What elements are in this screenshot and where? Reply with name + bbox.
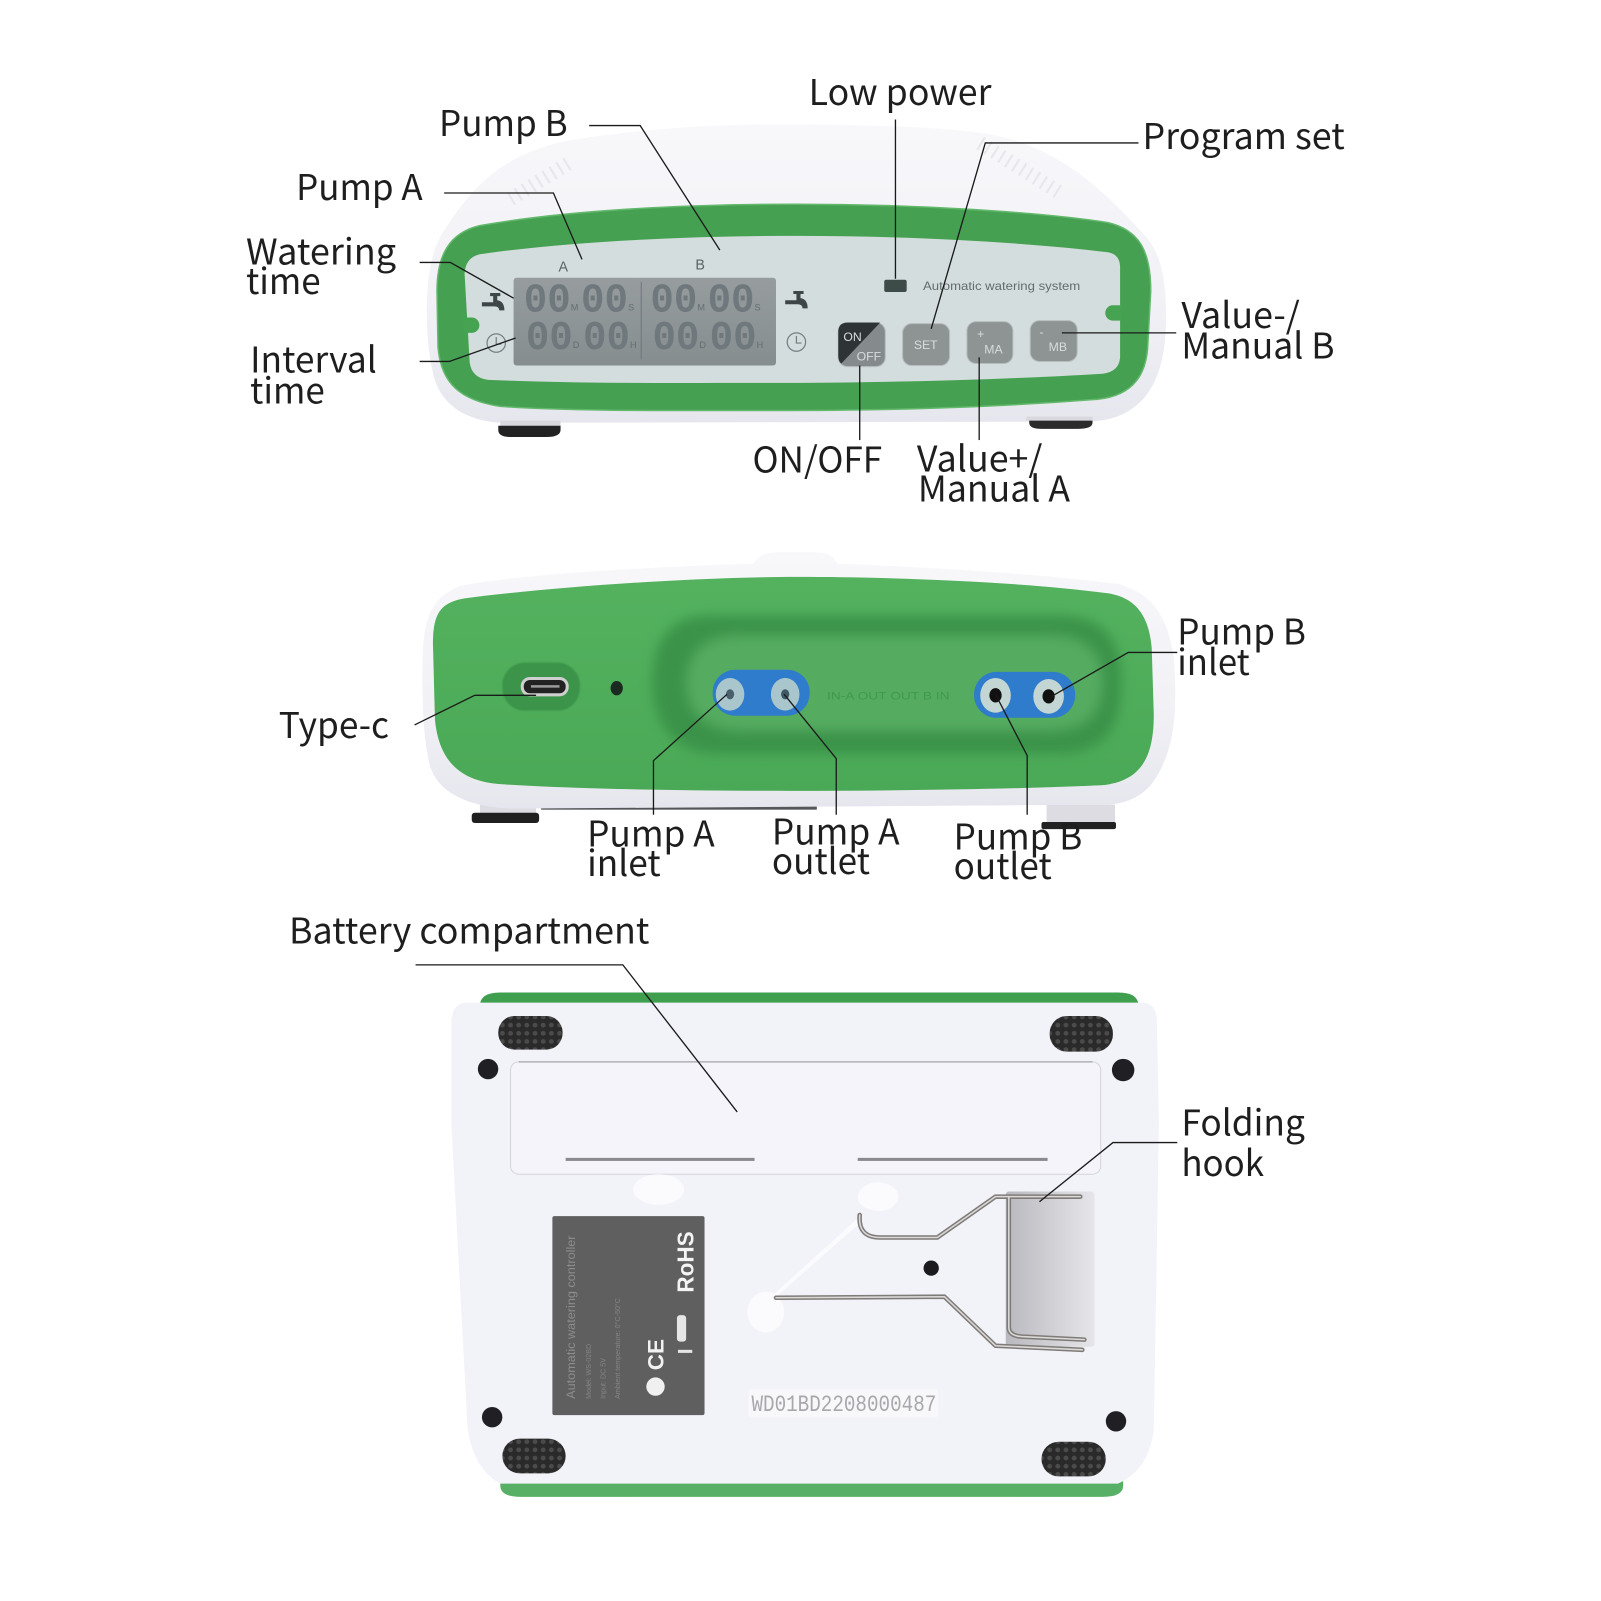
LCD screen: D: [699, 340, 706, 350]
rear foot left: [472, 802, 539, 823]
LCD screen: [514, 278, 776, 366]
spec label: Input: DC 5V: [599, 1358, 607, 1399]
button ON/OFF: [838, 323, 885, 367]
callout: Value-/Manual B: Value-/: [1181, 288, 1300, 339]
callout: Pump A outlet: [772, 694, 900, 885]
button SET: [903, 324, 950, 366]
rear green face: [433, 577, 1154, 791]
pump A connectors: [713, 670, 810, 716]
hook pivot hole: [924, 1260, 939, 1276]
callout: Pump A: [296, 160, 582, 259]
button MB: -: [1039, 325, 1044, 339]
spec label: Ambient temperature: 0°C-50°C: [614, 1298, 622, 1399]
callout: Value-/Manual B: [1062, 288, 1335, 369]
callout: Folding hook: Folding: [1181, 1095, 1305, 1146]
LCD screen: D: [573, 340, 580, 350]
callout: Pump B inlet: [1052, 604, 1306, 696]
callout: Pump A: Pump A: [296, 160, 423, 211]
button MA: MA: [984, 342, 1003, 356]
spec label: Model: WS-02BD: [585, 1344, 593, 1399]
spec label: [552, 1216, 705, 1415]
spec label: Automatic watering controller: [565, 1235, 578, 1399]
button MA: [967, 322, 1013, 363]
rear shell: [422, 552, 1175, 809]
LCD screen: S: [628, 302, 634, 312]
vent dots left: [511, 161, 572, 199]
button SET: SET: [914, 338, 938, 352]
device rear view: [422, 552, 1175, 829]
serial number sticker: WD01BD2208000487: [751, 1392, 936, 1419]
callout: Pump A outlet: outlet: [772, 834, 870, 885]
USB-C pocket: [502, 663, 580, 711]
callout: Watering time: time: [246, 254, 321, 305]
LCD screen: H: [757, 340, 763, 350]
spec label: CE: [644, 1339, 669, 1370]
hook recess window: [1006, 1192, 1095, 1347]
callout: Type-c: [279, 695, 536, 749]
callout: Folding hook: hook: [1181, 1136, 1264, 1187]
LCD screen: 00: [710, 316, 757, 362]
hinge bumps: [633, 1174, 899, 1332]
LCD screen: S: [755, 302, 761, 312]
callout: Pump B outlet: outlet: [954, 839, 1052, 890]
LCD screen: 00: [524, 278, 571, 324]
USB-C port: [521, 677, 569, 696]
callout: Folding hook: [1039, 1095, 1305, 1202]
rubber feet: [498, 1016, 1113, 1476]
battery cover: [511, 1062, 1101, 1174]
callout: Value-/Manual B: Manual B: [1181, 318, 1335, 369]
foot right: [1026, 417, 1093, 429]
LCD screen: 00: [581, 278, 628, 324]
LCD screen: 00: [583, 316, 630, 362]
callout: Interval time: [250, 333, 516, 414]
button ON/OFF: OFF: [857, 349, 881, 363]
LCD screen: 00: [708, 278, 755, 324]
callout: Interval time: time: [250, 363, 325, 414]
channel letter A: A: [559, 260, 569, 276]
callout: Value+/Manual A: Manual A: [918, 461, 1070, 512]
button MB: MB: [1049, 340, 1067, 354]
callout: Pump B inlet: Pump B: [1177, 604, 1306, 655]
icon: clock right: [787, 333, 806, 351]
callout: Pump B: Pump B: [439, 96, 568, 147]
vent dots right: [980, 143, 1062, 194]
button MB: [1030, 321, 1077, 361]
callout: Pump B outlet: [954, 694, 1082, 890]
callout: Battery compartment: [289, 903, 737, 1112]
callout: Watering time: Watering: [246, 224, 396, 275]
callout: Battery compartment: Battery compartment: [289, 903, 649, 954]
port legend text: IN-A OUT OUT B IN: [827, 690, 950, 702]
LCD screen: 00: [526, 316, 573, 362]
LCD screen: M: [697, 302, 705, 312]
callout: Interval time: Interval: [250, 333, 377, 384]
button MA: +: [977, 327, 984, 341]
bottom green edges: [480, 992, 1138, 1497]
reset hole: [611, 681, 623, 695]
callout: Pump B outlet: Pump B: [954, 810, 1082, 861]
icon: clock left: [487, 334, 505, 352]
folding hook wire: [776, 1197, 1084, 1350]
callout: Value+/Manual A: Value+/: [917, 432, 1042, 483]
panel caption: Automatic watering system: [923, 279, 1080, 293]
LCD screen: H: [630, 340, 637, 350]
recess inner: [686, 635, 1103, 731]
channel letter B: B: [695, 258, 705, 274]
button ON/OFF: ON: [843, 330, 862, 344]
notch right: [1105, 305, 1122, 321]
callout: ON/OFF: [753, 366, 882, 484]
callout: Program set: Program set: [1143, 109, 1345, 160]
notch left: [463, 318, 479, 333]
device front view: [427, 125, 1166, 437]
callout: Pump A inlet: Pump A: [587, 806, 715, 857]
callout: Pump B inlet: inlet: [1177, 635, 1250, 686]
front shell: [427, 125, 1166, 423]
pump B connectors: [974, 672, 1075, 718]
callout: ON/OFF: ON/OFF: [753, 433, 882, 484]
spec label: RoHS: [672, 1231, 698, 1293]
device bottom view: [451, 992, 1159, 1497]
LCD screen: M: [571, 302, 578, 312]
recess: [652, 616, 1121, 754]
rear dark strip: [541, 805, 817, 810]
display panel: [465, 236, 1120, 383]
callout: Pump B: [439, 96, 720, 250]
callout: Program set: [931, 109, 1345, 329]
rear foot right: [1041, 805, 1116, 829]
foot left: [498, 421, 561, 437]
icon: tap right: [785, 291, 808, 308]
callout: Low power: Low power: [809, 65, 992, 116]
LCD screen: 00: [650, 278, 697, 324]
callout: Pump A inlet: inlet: [587, 836, 661, 887]
callout: Type-c: Type-c: [279, 698, 389, 749]
callout: Value+/Manual A: [917, 357, 1070, 512]
callout: Pump A outlet: Pump A: [772, 804, 900, 855]
green frame: [437, 204, 1151, 411]
callout: Pump A inlet: [587, 694, 727, 887]
screw holes: [478, 1059, 1134, 1432]
icon: tap left: [482, 293, 504, 310]
LCD screen: 00: [652, 316, 699, 362]
low power indicator: [884, 280, 907, 292]
bottom shell: [451, 1003, 1159, 1484]
callout: Watering time: [246, 224, 514, 305]
